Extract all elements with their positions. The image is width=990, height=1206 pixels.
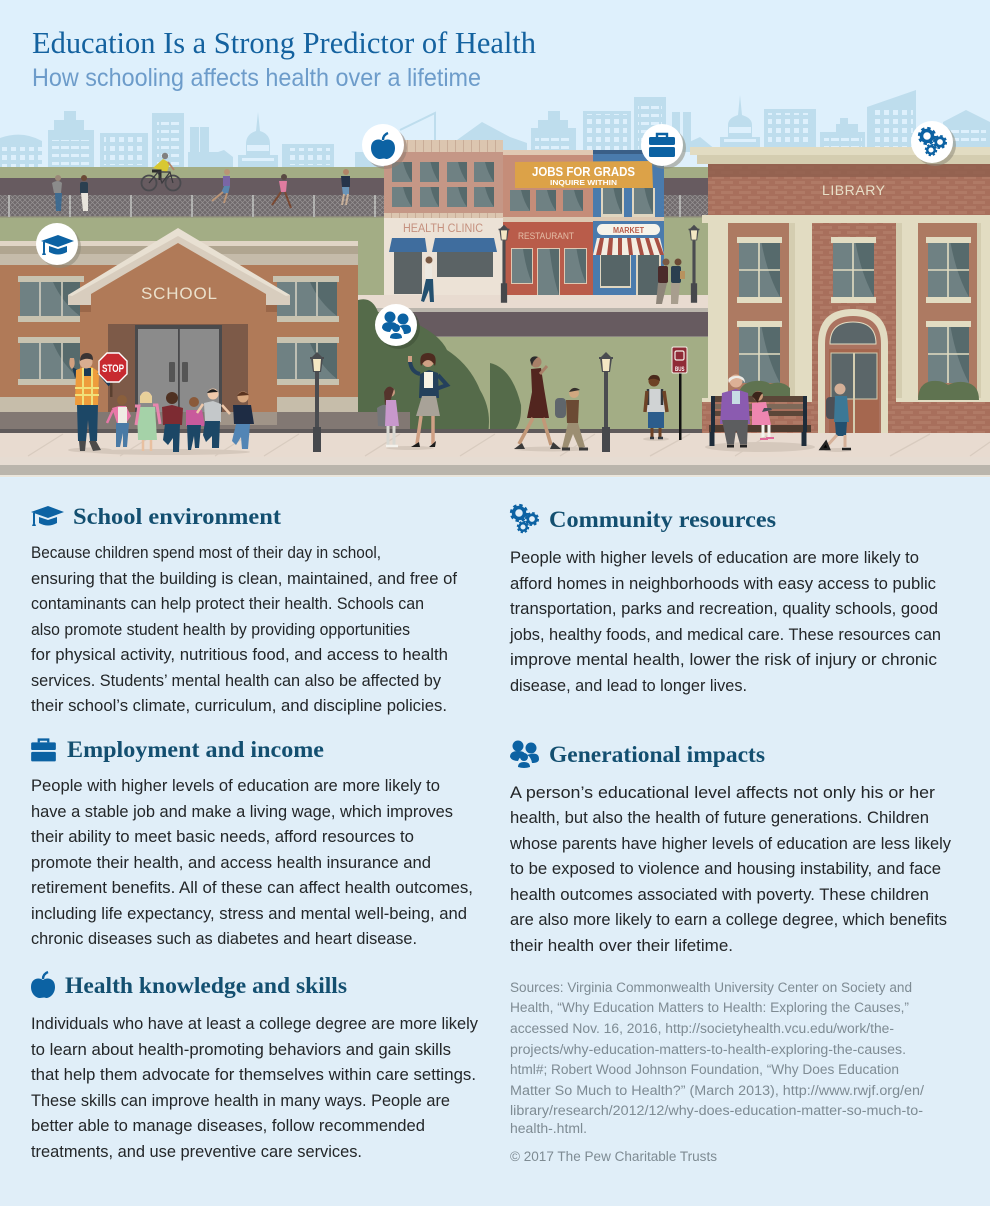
crossing guard with stop sign: STOP [102, 363, 124, 375]
heading: generational impacts: Generational impacts [549, 742, 765, 767]
body text: community resources: improve mental health, lower the risk of injury or chronic [510, 651, 937, 669]
body text: generational impacts: health, but also the health of future generations. Children [510, 809, 929, 827]
body text: school environment: services. Students’ mental health can also be affected by [31, 672, 442, 690]
body text: school environment: for physical activity, nutritious food, and access to health [31, 646, 448, 664]
icon: people [510, 740, 539, 768]
body text: employment and income [31, 777, 473, 948]
body text: health knowledge and skills: treatments, and use preventive care services. [31, 1143, 362, 1161]
body text: employment and income: People with higher levels of education are more likely to [31, 777, 440, 795]
building: restaurant: RESTAURANT [518, 231, 574, 242]
body text: health knowledge and skills: to learn about health-promoting behaviors and gain skills [31, 1041, 451, 1059]
body text: school environment: ensuring that the building is clean, maintained, and free of [31, 570, 458, 588]
title: Education Is a Strong Predictor of Health [32, 25, 536, 60]
sources [510, 980, 924, 1136]
icon: briefcase [31, 740, 56, 761]
body text: generational impacts: health outcomes associated with poverty. These children [510, 886, 929, 904]
body text: generational impacts: whose parents have higher levels of education are less likely [509, 835, 952, 853]
body text: employment and income: chronic diseases such as diabetes and heart disease. [31, 930, 417, 948]
body text: school environment: contaminants can help protect their health. Schools can [31, 595, 424, 613]
body text: school environment: Because children spend most of their day in school, [31, 544, 381, 562]
body text: community resources [509, 549, 941, 695]
sources: Sources: Virginia Commonwealth University Center on Society and [510, 980, 912, 995]
building: school: SCHOOL [141, 284, 217, 303]
body text: employment and income: promote their health, and access health insurance and [31, 854, 431, 872]
illustration: neighborhood scene [0, 0, 990, 478]
body text: generational impacts: their health over their lifetime. [510, 937, 733, 955]
section: generational impacts [509, 740, 952, 955]
bench with grandmother and girl [705, 374, 815, 452]
body text: health knowledge and skills [31, 1015, 479, 1161]
banner: jobs for grads: INQUIRE WITHIN [550, 178, 617, 187]
sources: library/research/2012/12/why-does-education-matter-so-much-to- [510, 1103, 923, 1118]
icon badge: graduation cap [36, 223, 81, 268]
sources: Health, “Why Education Matters to Health: Exploring the Causes,” [510, 1000, 909, 1015]
bushes [358, 299, 521, 433]
icon badge: apple [362, 124, 407, 169]
body text: health knowledge and skills: better able to manage diseases, follow recommended [31, 1117, 425, 1135]
body text: school environment: also promote student health by providing opportunities [31, 621, 410, 639]
icon badge: briefcase [641, 124, 686, 169]
body text: health knowledge and skills: that help them advocate for themselves within care settings. [31, 1066, 476, 1084]
body text: generational impacts: are also more likely to earn a college degree, which benefits [510, 911, 947, 929]
body text: health knowledge and skills: These skills can improve health in many ways. People are [31, 1092, 450, 1110]
section: employment and income [31, 737, 473, 948]
sources: projects/why-education-matters-to-health-exploring-the-causes. [510, 1042, 906, 1057]
building: library [690, 147, 990, 433]
building: restaurant [503, 150, 593, 295]
people on the path [52, 153, 350, 211]
bus stop sign: BUS [675, 366, 685, 373]
sources: html#; Robert Wood Johnson Foundation, “Why Does Education [510, 1062, 899, 1077]
body text: school environment: their school’s climate, curriculum, and discipline policies. [31, 697, 447, 715]
body text: generational impacts: to be exposed to violence and housing instability, and face [510, 860, 941, 878]
building: market: MARKET [613, 226, 644, 235]
hillside and running path [0, 167, 990, 433]
sources: Matter So Much to Health?” (March 2013), http://www.rwjf.org/en/ [510, 1083, 924, 1098]
woman and girl waving [377, 353, 447, 450]
upper sidewalk and road [358, 295, 708, 337]
building: library: LIBRARY [822, 182, 886, 198]
section: school environment [31, 504, 458, 715]
sources: accessed Nov. 16, 2016, http://societyhealth.vcu.edu/work/the- [510, 1021, 894, 1036]
icon badge: people [375, 304, 420, 349]
banner: jobs for grads [515, 161, 653, 188]
couple at market [656, 258, 685, 304]
body text: employment and income: have a stable job and make a living wage, which improves [31, 803, 453, 821]
body text: employment and income: retirement benefits. All of these can affect health outcomes, [31, 879, 473, 897]
building: health clinic: HEALTH CLINIC [403, 223, 483, 235]
copyright: © 2017 The Pew Charitable Trusts [510, 1149, 717, 1164]
street lamps lower [310, 352, 613, 452]
building: market [593, 150, 664, 295]
school children [90, 388, 254, 455]
building: health clinic [384, 140, 503, 295]
icon badge: gears [911, 121, 956, 166]
body text: generational impacts [509, 784, 952, 955]
crossing guard with stop sign [68, 353, 127, 452]
body text: school environment [31, 544, 458, 715]
body text: employment and income: their ability to meet basic needs, afford resources to [31, 828, 414, 846]
body text: community resources: transportation, parks and recreation, quality schools, good [510, 600, 938, 618]
banner: jobs for grads: JOBS FOR GRADS [532, 165, 635, 179]
icon: apple [31, 972, 55, 998]
body text: community resources: jobs, healthy foods, and medical care. These resources can [509, 626, 941, 644]
heading: school environment: School environment [73, 504, 281, 529]
heading: health knowledge and skills: Health knowledge and skills [65, 973, 347, 998]
body text: community resources: afford homes in neighborhoods with easy access to public [510, 575, 936, 593]
woman on phone and boy [514, 356, 590, 452]
heading: community resources: Community resources [549, 507, 776, 532]
boy at bus stop [643, 375, 669, 441]
icon: gears [511, 505, 538, 532]
section: community resources [509, 505, 941, 695]
body text: generational impacts: A person’s educational level affects not only his or her [510, 784, 936, 802]
school steps and sidewalk [0, 412, 990, 477]
section: health knowledge and skills [31, 972, 479, 1161]
body text: community resources: People with higher levels of education are more likely to [510, 549, 919, 567]
man at clinic [421, 256, 434, 302]
city skyline [0, 90, 990, 167]
body text: employment and income: including life expectancy, stress and mental well-being, and [31, 905, 467, 923]
heading: employment and income: Employment and income [67, 737, 324, 762]
icon: graduation cap [31, 506, 64, 526]
street lamps upper [499, 225, 699, 303]
boy at library door [821, 384, 852, 452]
body text: health knowledge and skills: Individuals who have at least a college degree are more likely [31, 1015, 479, 1033]
body text: community resources: disease, and lead to longer lives. [510, 677, 747, 695]
subtitle: How schooling affects health over a lifetime [32, 64, 481, 92]
sources: health-.html. [510, 1121, 587, 1136]
building: school [0, 228, 358, 412]
bus stop sign [672, 347, 687, 440]
